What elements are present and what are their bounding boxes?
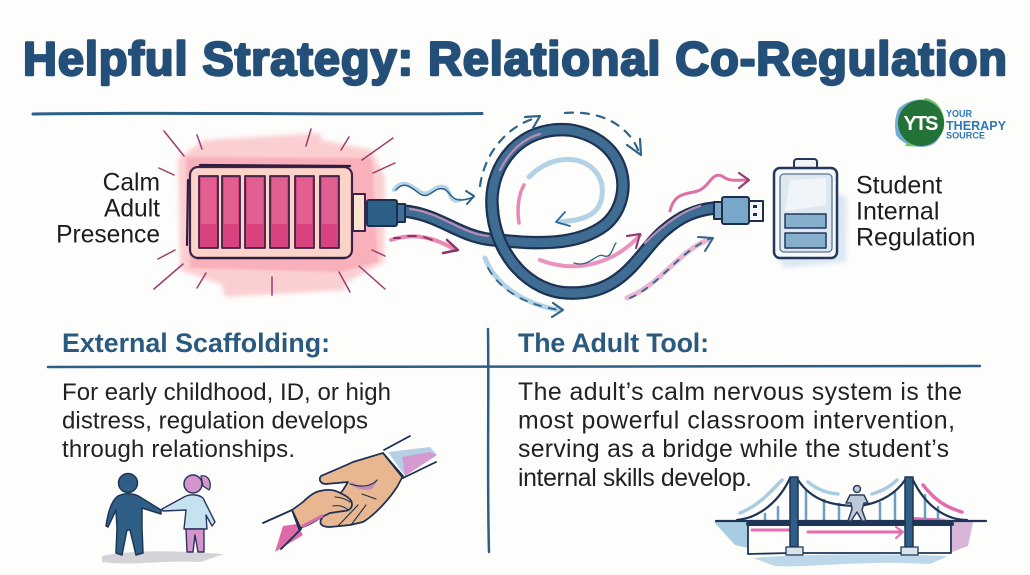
- arrow: dashed blue arc right: [565, 113, 641, 155]
- plug left: [367, 200, 405, 226]
- adult cuff lines: [383, 436, 436, 478]
- label: calm adult presence: Presence: [56, 222, 160, 248]
- glow rays: [154, 129, 395, 295]
- body text: internal skills develop.: [518, 465, 752, 492]
- arrow: pink under loop: [540, 234, 640, 266]
- logo: your therapy source: SOURCE: [946, 130, 985, 142]
- icon: full pink battery with glow: [154, 129, 395, 297]
- flow arrows: [391, 113, 749, 317]
- heading: The Adult Tool:: [518, 328, 709, 358]
- title: Helpful Strategy: Relational Co-Regulation: [23, 32, 1007, 85]
- logo: your therapy source: YOUR: [946, 109, 973, 120]
- child cuff lines: [263, 510, 301, 549]
- battery casing: [190, 167, 352, 258]
- label: student internal regulation: Regulation: [856, 224, 976, 252]
- body text: through relationships.: [62, 436, 295, 463]
- battery cells: [199, 176, 339, 248]
- child cuff: [275, 524, 303, 552]
- arrow: blue squiggle left: [394, 184, 474, 204]
- adult hand: [320, 453, 403, 527]
- label: student internal regulation: Internal: [856, 198, 939, 226]
- arrow: dashed blue bottom: [485, 258, 563, 317]
- body text: most powerful classroom intervention,: [518, 408, 955, 434]
- logo: your therapy source: YTS: [904, 113, 938, 135]
- body text: [518, 379, 962, 492]
- label: calm adult presence: Adult: [104, 196, 160, 222]
- walking person: [846, 486, 868, 521]
- logo: your therapy source: [895, 98, 1006, 147]
- body text: distress, regulation develops: [62, 408, 368, 434]
- arrow: inner loop light blue: [529, 159, 602, 226]
- cable with loop: [367, 130, 763, 293]
- icon: adult hand holding child hand: [263, 436, 437, 552]
- battery glow: [178, 133, 385, 297]
- label: calm adult presence: Calm: [103, 170, 160, 196]
- panel: the adult tool: [518, 328, 986, 566]
- body text: The adult’s calm nervous system is the: [518, 379, 962, 406]
- arrow: dashed pink and blue lower right: [627, 237, 713, 298]
- body text: serving as a bridge while the student’s: [518, 436, 949, 463]
- panel: external scaffolding: [62, 328, 437, 563]
- body text: For early childhood, ID, or high: [62, 379, 391, 406]
- logo: your therapy source: THERAPY: [946, 118, 1006, 133]
- icon: nearly empty student battery: [774, 159, 847, 268]
- adult cuff: [388, 447, 437, 476]
- child hand: [292, 490, 352, 529]
- label: student internal regulation: Student: [856, 172, 942, 200]
- cable body: [403, 130, 715, 293]
- label: calm adult presence: [56, 170, 160, 248]
- icon: adult and child holding hands: [102, 474, 224, 563]
- battery charge cells: [785, 214, 826, 248]
- arrow: pink squiggle upper right: [670, 173, 749, 211]
- label: student internal regulation: [856, 172, 976, 252]
- arrow: pink dashed left: [391, 236, 458, 253]
- arrow: inner loop pink: [518, 185, 524, 223]
- arrow: dashed blue arc up: [480, 116, 540, 186]
- body text: [62, 379, 391, 463]
- icon: suspension bridge with person: [714, 477, 986, 566]
- battery terminal: [353, 194, 365, 231]
- plug right usb: [714, 197, 763, 224]
- heading: External Scaffolding:: [62, 328, 330, 358]
